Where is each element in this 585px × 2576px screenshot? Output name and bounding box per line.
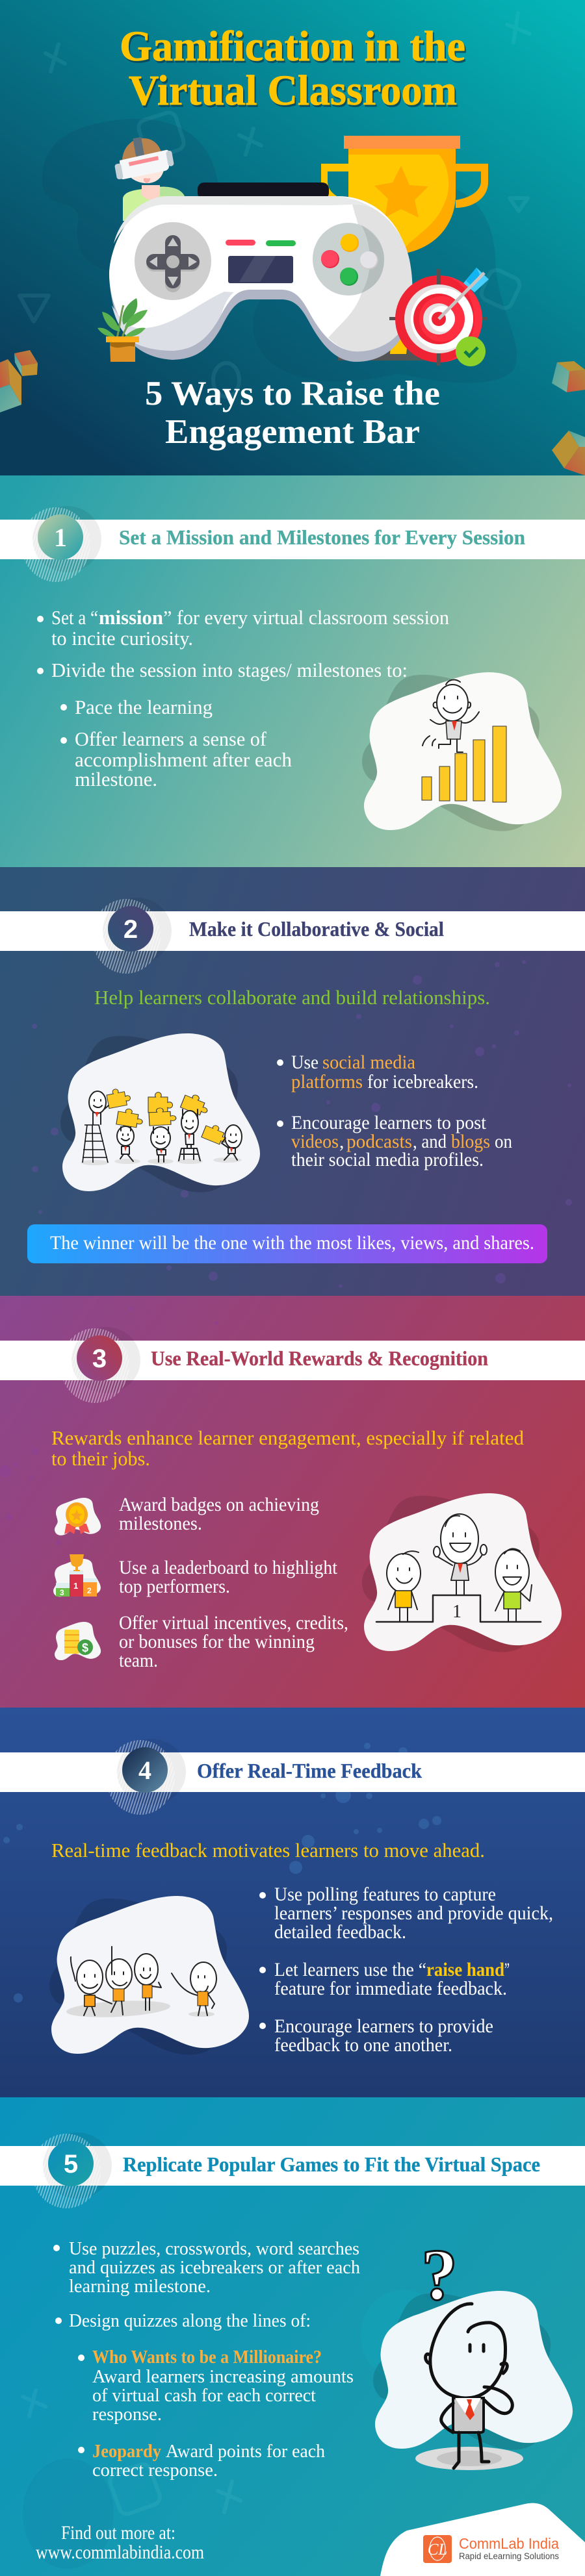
background shapes	[20, 13, 530, 397]
section 2 intro: Help learners collaborate and build relationships.	[94, 986, 490, 1009]
section 4 bullet list: Let learners use the “	[274, 1960, 426, 1980]
panel: header	[0, 0, 585, 475]
subtitle: 5 Ways to Raise the	[145, 375, 440, 412]
footer: CommLab India logo: CL	[428, 2541, 447, 2558]
speckles	[0, 1306, 218, 1545]
item: badges: milestones.	[119, 1513, 202, 1534]
section 5 bullet list: and quizzes as icebreakers or after each	[69, 2258, 360, 2278]
background shapes	[23, 2290, 445, 2569]
section 2 bullet list: platforms	[291, 1072, 363, 1092]
footer: CommLab India logo: Rapid eLearning Solutions	[459, 2551, 559, 2561]
section 5 heading banner: 5	[64, 2150, 78, 2178]
decorative cubes	[0, 350, 585, 475]
section 1 heading banner: 1	[54, 523, 67, 552]
section 4 bullet list: ”	[504, 1960, 510, 1980]
subtitle: Engagement Bar	[165, 413, 420, 451]
illustration: thinking man: ?	[421, 2235, 458, 2316]
section 4 heading banner: 4	[138, 1756, 151, 1785]
icon: target with arrow	[389, 268, 489, 366]
section 5 bullet list: correct response.	[92, 2460, 218, 2481]
section 2 heading banner: Make it Collaborative & Social	[189, 918, 444, 941]
item: leaderboard: 2	[87, 1586, 92, 1595]
icon: plant	[98, 298, 148, 362]
icon: game controller	[109, 183, 412, 362]
callout: the winner: The winner will be the one with the most likes, views, and shares.	[50, 1233, 534, 1254]
section 1 bullet list	[37, 606, 449, 790]
section 5 bullet list: Award learners increasing amounts	[92, 2367, 354, 2387]
section 1 bullet list: accomplishment after each	[75, 748, 292, 771]
section 4 bullet list: feedback to one another.	[274, 2035, 452, 2056]
section 5 bullet list: Jeopardy	[92, 2442, 161, 2462]
section 1 bullet list: to incite curiosity.	[51, 627, 193, 650]
section 5 bullet list	[53, 2239, 360, 2481]
subtitle	[145, 375, 440, 451]
title: Gamification in the	[120, 23, 465, 70]
section 2 bullet list: , and	[413, 1131, 447, 1152]
section 1 bullet list: Offer learners a sense of	[75, 727, 267, 750]
section 5 bullet list: Who Wants to be a Millionaire?	[92, 2347, 322, 2368]
item: virtual incentives: or bonuses for the winning	[119, 1632, 315, 1652]
section 5 heading banner	[0, 2132, 585, 2208]
section 1 bullet list: Divide the session into stages/ milestones to:	[51, 659, 408, 681]
item: virtual incentives: $	[82, 1641, 88, 1654]
section 4 bullet list: Encourage learners to provide	[274, 2016, 493, 2037]
footer: find out more: www.commlabindia.com	[36, 2542, 204, 2563]
section 1 bullet list: Set a “	[51, 606, 98, 629]
footer: CommLab India logo: CommLab India	[459, 2535, 559, 2552]
section 3 heading banner	[0, 1327, 585, 1403]
section 5 bullet list: Award points for each	[166, 2442, 325, 2462]
footer: CommLab India logo	[380, 2503, 585, 2576]
section 3 intro	[51, 1426, 524, 1470]
item: leaderboard: 3	[60, 1588, 64, 1597]
section 1 heading banner	[0, 506, 585, 582]
section 2 bullet list: for icebreakers.	[367, 1072, 478, 1092]
section 3 intro: to their jobs.	[51, 1447, 150, 1470]
section 1 bullet list: mission	[99, 606, 163, 629]
section 4 bullet list: detailed feedback.	[274, 1922, 406, 1943]
section 4 heading banner	[0, 1739, 585, 1815]
icon: VR learner	[114, 137, 185, 221]
item: leaderboard	[53, 1554, 338, 1597]
icon: trophy	[321, 136, 488, 360]
section 2 bullet list	[277, 1052, 512, 1170]
speckles	[32, 960, 572, 1288]
section 2 heading banner: 2	[124, 915, 138, 944]
section 4 heading banner: Offer Real-Time Feedback	[197, 1760, 422, 1782]
panel: section 3 rewards and recognition	[0, 1296, 585, 1708]
illustration: thinking man	[373, 2235, 573, 2470]
section 2 bullet list: Use	[291, 1052, 318, 1073]
section 3 intro: Rewards enhance learner engagement, especially if related	[51, 1426, 524, 1449]
title: Virtual Classroom	[129, 67, 457, 114]
illustration: winners on podium: 1	[452, 1602, 462, 1622]
item: leaderboard: Use a leaderboard to highlight	[119, 1558, 338, 1578]
panel: section 5 popular games	[0, 2097, 585, 2576]
section 2 bullet list: blogs	[451, 1131, 490, 1152]
section 5 heading banner: Replicate Popular Games to Fit the Virtual Space	[123, 2153, 540, 2176]
section 4 bullet list	[259, 1884, 553, 2056]
section 1 bullet list: ” for every virtual classroom session	[163, 606, 449, 629]
illustration: winners on podium	[362, 1493, 562, 1652]
section 2 heading banner	[0, 898, 585, 974]
illustration: climbing bar chart	[362, 672, 562, 831]
item: virtual incentives: team.	[119, 1650, 158, 1671]
section 3 heading banner: Use Real-World Rewards & Recognition	[151, 1347, 488, 1370]
section 2 bullet list: podcasts	[346, 1131, 412, 1152]
section 1 bullet list: milestone.	[75, 768, 157, 790]
item: leaderboard: 1	[73, 1581, 78, 1591]
item: virtual incentives: Offer virtual incentives, credits,	[119, 1613, 348, 1634]
illustration: raising hands	[49, 1896, 249, 2055]
item: badges: Award badges on achieving	[119, 1495, 319, 1515]
section 4 bullet list: feature for immediate feedback.	[274, 1978, 507, 1999]
item: badges	[55, 1495, 319, 1535]
section 2 bullet list: ,	[339, 1131, 344, 1152]
section 1 bullet list: Pace the learning	[75, 696, 213, 718]
section 2 bullet list: Encourage learners to post	[291, 1113, 487, 1133]
footer: find out more	[36, 2523, 204, 2563]
speckles	[3, 1743, 441, 2002]
section 5 bullet list: of virtual cash for each correct	[92, 2386, 316, 2406]
title	[120, 23, 465, 114]
section 2 bullet list: their social media profiles.	[291, 1150, 484, 1170]
item: leaderboard: top performers.	[119, 1576, 230, 1597]
section 2 bullet list: on	[495, 1131, 512, 1152]
section 4 bullet list: raise hand	[426, 1960, 505, 1980]
section 2 bullet list: social media	[322, 1052, 415, 1073]
panel: section 4 real-time feedback	[0, 1708, 585, 2097]
panel: section 1 mission and milestones	[0, 475, 585, 867]
section 5 bullet list: learning milestone.	[69, 2277, 211, 2297]
section 4 bullet list: Use polling features to capture	[274, 1884, 496, 1905]
item: virtual incentives	[55, 1613, 348, 1671]
callout: the winner	[27, 1224, 547, 1263]
section 5 bullet list: response.	[92, 2405, 162, 2425]
section 4 bullet list: learners’ responses and provide quick,	[274, 1903, 553, 1924]
section 5 bullet list: Design quizzes along the lines of:	[69, 2311, 311, 2331]
panel: section 2 collaborative and social	[0, 867, 585, 1296]
section 4 intro: Real-time feedback motivates learners to move ahead.	[51, 1839, 485, 1862]
illustration: team assembling puzzle	[60, 1033, 260, 1193]
section 3 heading banner: 3	[92, 1345, 107, 1373]
section 2 bullet list: videos	[291, 1131, 339, 1152]
section 1 heading banner: Set a Mission and Milestones for Every Session	[119, 526, 525, 549]
section 5 bullet list: Use puzzles, crosswords, word searches	[69, 2239, 359, 2259]
footer: find out more: Find out more at:	[61, 2523, 176, 2544]
